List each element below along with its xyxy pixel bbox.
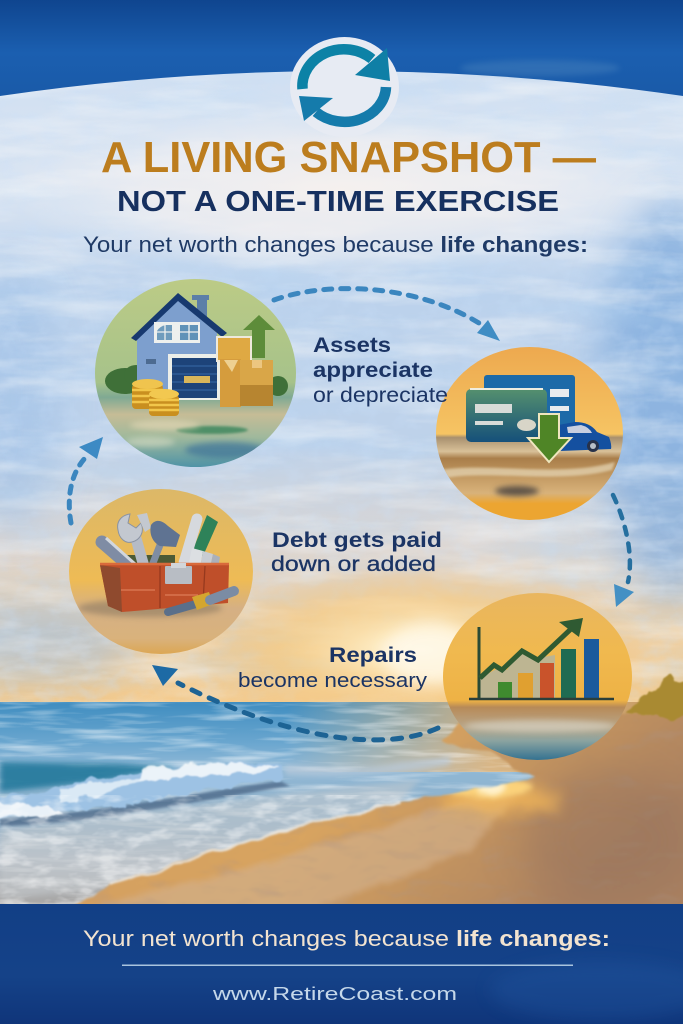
wave crest: [0, 762, 284, 820]
panel: cards circle: [436, 347, 624, 521]
label: debt: Debt gets paid: [272, 528, 442, 552]
panel: toolbox circle: [69, 489, 254, 655]
title line 1: A LIVING SNAPSHOT —: [101, 133, 596, 182]
lower arrow: [299, 87, 386, 122]
icon: house: [131, 293, 227, 398]
icon: toolbox: [100, 563, 229, 612]
subtitle: Your net worth changes because life changes:: [83, 232, 588, 257]
icon: coins: [132, 379, 179, 416]
shoreline foam: [110, 802, 400, 886]
label: repairs: Repairs: [329, 644, 417, 667]
icon: green card: [466, 389, 547, 442]
icon: screwdriver: [168, 591, 234, 612]
label: assets: [313, 333, 448, 407]
icon: garage: [168, 354, 220, 400]
label: repairs: become necessary: [238, 670, 427, 692]
label: repairs: [238, 644, 427, 692]
upper arrow: [302, 48, 390, 89]
bush on shore: [626, 674, 683, 718]
top banner: [0, 0, 683, 96]
title: [101, 133, 596, 218]
background: sky: [0, 60, 683, 735]
footer band: [0, 904, 683, 1024]
background: beach: [74, 713, 683, 904]
icon: blue card: [484, 375, 575, 427]
icon: down arrow: [528, 414, 571, 462]
label: assets: Assets: [313, 333, 391, 357]
footer message: Your net worth changes because life changes:: [83, 926, 610, 951]
icon: bushes: [105, 365, 288, 396]
website url: www.RetireCoast.com: [212, 984, 457, 1004]
bottom band guard above footer: [0, 904, 683, 906]
label: assets: or depreciate: [313, 384, 448, 407]
label: debt: [271, 528, 442, 576]
arrow: bottom cycle arrow: [152, 665, 438, 740]
arrow: right cycle arrow: [613, 495, 634, 607]
icon: car: [558, 422, 611, 452]
background: sea: [0, 702, 683, 905]
label: debt: down or added: [271, 553, 436, 576]
title line 2: NOT A ONE-TIME EXERCISE: [117, 186, 559, 218]
label: assets: appreciate: [313, 358, 433, 382]
icon: bar chart: [469, 618, 614, 699]
arrow: left cycle arrow: [69, 437, 103, 523]
icon: refresh cycle: [290, 37, 399, 137]
arrow: top cycle arrow: [274, 289, 500, 341]
panel: assets circle: [95, 279, 297, 467]
icon: green up arrow: [243, 315, 275, 358]
panel: chart circle: [443, 593, 633, 761]
icon: tools: [96, 513, 220, 563]
icon: boxes: [216, 336, 273, 407]
